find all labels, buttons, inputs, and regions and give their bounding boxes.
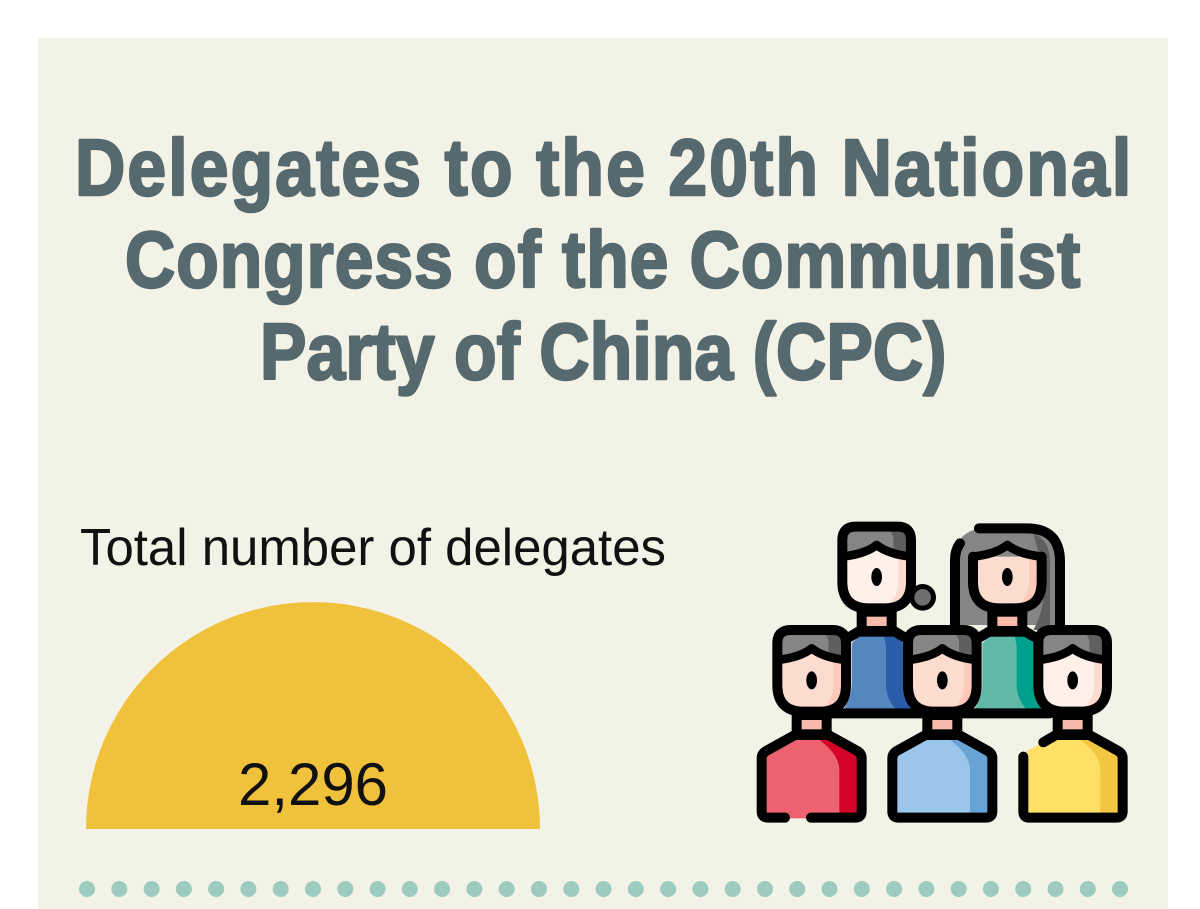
- value: 2,296: 2,296: [238, 751, 388, 818]
- back right person's long hair: [955, 528, 1060, 630]
- person: front middle, blue: [892, 630, 992, 818]
- title: Party of China (CPC): [260, 306, 946, 396]
- back right body: [974, 632, 1042, 710]
- back left body: [843, 632, 912, 710]
- icon: group of delegates: [762, 527, 1123, 818]
- title: Congress of the Communist: [125, 214, 1080, 304]
- chart: semicircle total: [86, 602, 540, 829]
- dotted divider: [79, 881, 1128, 897]
- back bun: [909, 584, 936, 611]
- person: front right, yellow: [1023, 630, 1123, 818]
- title: Delegates to the 20th National: [75, 122, 1131, 212]
- title: [75, 122, 1131, 396]
- person: back left: [842, 527, 911, 637]
- heading: total number of delegates: Total number of delegates: [80, 519, 666, 577]
- bench line: [830, 698, 1050, 728]
- person: front left, red: [762, 630, 862, 818]
- person: back right: [973, 545, 1042, 637]
